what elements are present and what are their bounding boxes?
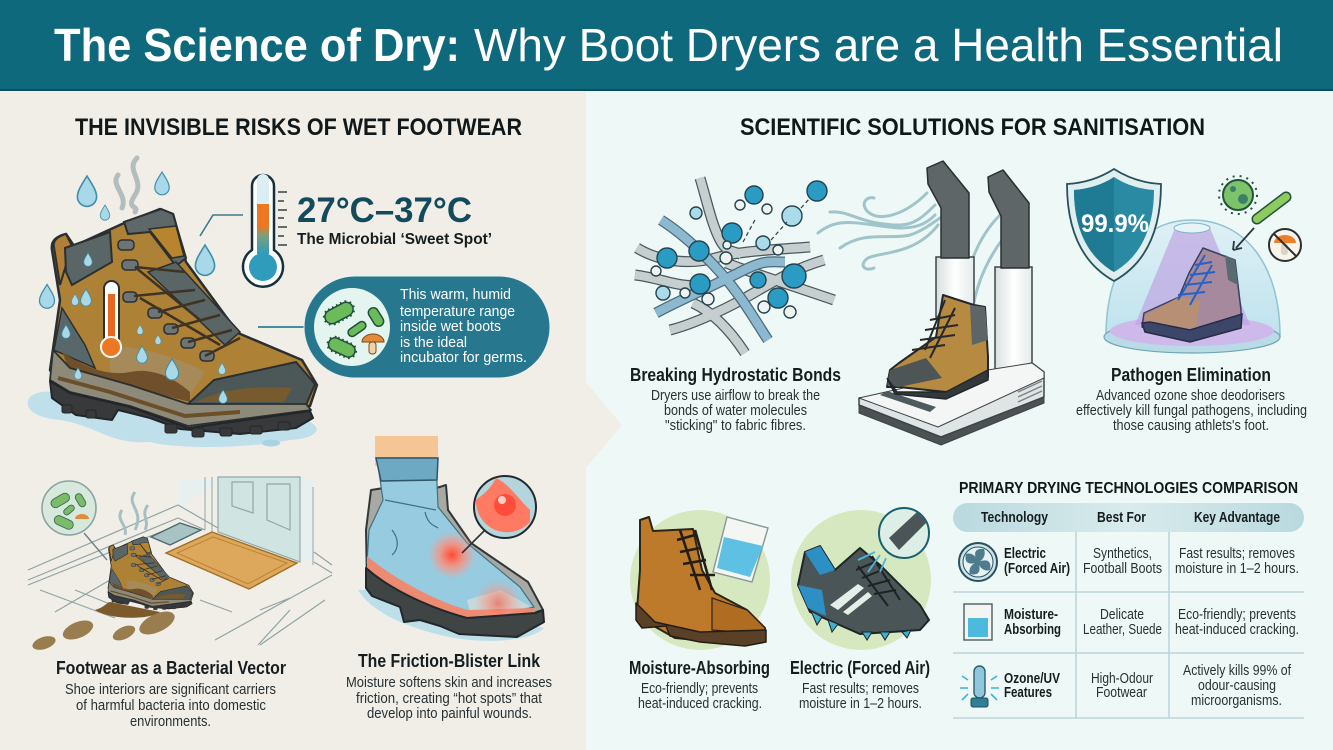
virus bbox=[1219, 176, 1257, 214]
icon: sachet bbox=[964, 604, 992, 640]
text: friction blister: Moisture softens skin and increases bbox=[346, 675, 552, 691]
text: moisture absorbing: heat-induced cracking. bbox=[638, 696, 762, 712]
shield: 99.9% bbox=[1081, 210, 1149, 238]
heading: moisture absorbing: Moisture-Absorbing bbox=[629, 658, 770, 678]
illustration: wet hiking boot bbox=[28, 158, 317, 447]
illustration: ozone dome with boot bbox=[1067, 169, 1301, 353]
sole bbox=[366, 568, 544, 637]
text: bacterial vector: of harmful bacteria into domestic bbox=[76, 698, 266, 714]
text: friction blister: develop into painful wounds. bbox=[367, 706, 532, 722]
red inner strip bbox=[367, 556, 536, 618]
base plate bbox=[1104, 321, 1280, 353]
callout: warm humid range: inside wet boots bbox=[400, 319, 501, 335]
text: pathogen elimination bbox=[1076, 388, 1307, 434]
sweet spot label: The Microbial ‘Sweet Spot’ bbox=[297, 231, 492, 248]
left tube bbox=[936, 257, 974, 317]
text: friction blister bbox=[346, 675, 552, 722]
row: ozone uv: High-Odour bbox=[1091, 671, 1153, 687]
airflow lines bbox=[818, 193, 1015, 315]
leg bbox=[375, 436, 438, 466]
steam bbox=[120, 492, 148, 535]
bacterium bbox=[1257, 197, 1286, 219]
row: ozone uv: Actively kills 99% of bbox=[1183, 663, 1292, 679]
heading: bacterial vector: Footwear as a Bacterial Vector bbox=[56, 658, 286, 678]
row: moisture absorbing: Leather, Suede bbox=[1083, 622, 1162, 638]
text: bacterial vector bbox=[65, 682, 276, 730]
panel: scientific solutions heading: SCIENTIFIC SOLUTIONS FOR SANITISATION bbox=[740, 114, 1205, 141]
text: hydrostatic bonds: Dryers use airflow to break the bbox=[651, 388, 820, 404]
text: moisture absorbing bbox=[638, 681, 762, 712]
row: ozone uv: Footwear bbox=[1096, 685, 1147, 701]
illustration: fabric fibres and water molecules bbox=[635, 178, 834, 353]
row: moisture absorbing: heat-induced cracking. bbox=[1175, 622, 1299, 638]
dome bbox=[1106, 220, 1280, 336]
row: moisture absorbing bbox=[964, 604, 1299, 640]
heading: electric forced air: Electric (Forced Air) bbox=[790, 658, 930, 678]
footprints bbox=[31, 607, 178, 652]
heading: pathogen elimination: Pathogen Elimination bbox=[1111, 365, 1271, 385]
water drops bbox=[40, 172, 227, 403]
puddle bbox=[28, 392, 317, 447]
row: electric: Football Boots bbox=[1083, 561, 1162, 577]
steam bbox=[116, 158, 138, 212]
panel: invisible risks heading: THE INVISIBLE RISKS OF WET FOOTWEAR bbox=[75, 114, 522, 141]
callout: warm humid range bbox=[304, 276, 550, 378]
sachet bbox=[713, 517, 768, 582]
text: electric forced air bbox=[799, 681, 922, 712]
outer boot shell bbox=[366, 485, 543, 614]
illustration: friction blister boot bbox=[358, 436, 544, 641]
text: pathogen elimination: Advanced ozone shoe deodorisers bbox=[1096, 388, 1285, 404]
callout: warm humid range: incubator for germs. bbox=[400, 350, 527, 366]
row: ozone uv: odour-causing bbox=[1198, 678, 1276, 694]
callout: warm humid range: is the ideal bbox=[400, 335, 467, 351]
sock cuff bbox=[376, 458, 438, 481]
icon: germs bbox=[314, 288, 390, 366]
icon: fan bbox=[959, 543, 997, 581]
hot spots bbox=[428, 531, 476, 579]
background: right panel bbox=[586, 91, 1333, 750]
doormat bbox=[166, 532, 297, 589]
table header: Key Advantage bbox=[1194, 510, 1280, 526]
nozzle bbox=[879, 508, 929, 558]
magnified blister bbox=[462, 530, 485, 553]
skirting and floor lines bbox=[28, 505, 332, 645]
row: electric bbox=[959, 543, 1299, 581]
temperature range: 27°C–37°C bbox=[297, 191, 472, 230]
text: electric forced air: Fast results; removes bbox=[802, 681, 919, 697]
title banner: The Science of Dry: bbox=[54, 19, 460, 71]
row: moisture absorbing: Eco-friendly; prevents bbox=[1178, 607, 1296, 623]
text: pathogen elimination: those causing athlets's foot. bbox=[1113, 418, 1269, 434]
illustration: leather boot with sachet bbox=[630, 510, 770, 650]
connector to callout bbox=[258, 326, 304, 328]
text: hydrostatic bonds: "sticking" to fabric fibres. bbox=[665, 418, 806, 434]
control panel bbox=[880, 391, 936, 412]
table header: Best For bbox=[1097, 510, 1146, 526]
small boot bbox=[108, 537, 193, 610]
comparison table heading: PRIMARY DRYING TECHNOLOGIES COMPARISON bbox=[959, 480, 1298, 497]
connector to thermometer bbox=[200, 215, 243, 236]
UV beam bbox=[1135, 228, 1250, 325]
vent bbox=[151, 523, 201, 545]
boot on dryer bbox=[887, 295, 988, 392]
row: ozone uv: Ozone/UV bbox=[1004, 671, 1060, 687]
heading: hydrostatic bonds: Breaking Hydrostatic Bonds bbox=[630, 365, 841, 385]
title banner: Why Boot Dryers are a Health Essential bbox=[474, 19, 1283, 71]
text: friction blister: friction, creating “hot spots” that bbox=[356, 691, 542, 707]
row: moisture absorbing: Delicate bbox=[1100, 607, 1144, 623]
title banner bbox=[0, 0, 1333, 91]
mud bbox=[95, 602, 160, 618]
text: electric forced air: moisture in 1–2 hours. bbox=[799, 696, 922, 712]
illustration: doorway with contaminated boot bbox=[28, 477, 332, 652]
right tube bbox=[995, 267, 1032, 379]
table header: Technology bbox=[981, 510, 1048, 526]
row: moisture absorbing: Moisture- bbox=[1004, 607, 1058, 623]
text: hydrostatic bonds bbox=[651, 388, 820, 434]
row: electric: Synthetics, bbox=[1093, 546, 1152, 562]
row: electric: moisture in 1–2 hours. bbox=[1175, 561, 1299, 577]
boot bbox=[1142, 248, 1241, 338]
text: bacterial vector: Shoe interiors are significant carriers bbox=[65, 682, 276, 698]
callout: warm humid range: This warm, humid bbox=[400, 287, 511, 303]
boot thermometer bbox=[101, 281, 121, 357]
wall and door bbox=[178, 477, 314, 562]
callout: warm humid range: temperature range bbox=[400, 304, 515, 320]
arrow divider between panels bbox=[584, 380, 622, 470]
row: ozone uv: Features bbox=[1004, 685, 1052, 701]
row: moisture absorbing: Absorbing bbox=[1004, 622, 1061, 638]
heading: friction blister: The Friction-Blister Link bbox=[358, 651, 541, 671]
row: electric: Fast results; removes bbox=[1179, 546, 1295, 562]
no fungi bbox=[1269, 229, 1301, 261]
illustration: boot dryer bbox=[859, 161, 1044, 445]
text: moisture absorbing: Eco-friendly; prevents bbox=[641, 681, 758, 697]
table header bbox=[953, 503, 1304, 532]
row: electric: Electric bbox=[1004, 546, 1046, 562]
germ callout bbox=[84, 533, 107, 560]
row: ozone uv: microorganisms. bbox=[1191, 693, 1282, 709]
background: left panel bbox=[0, 91, 586, 750]
text: bacterial vector: environments. bbox=[130, 714, 211, 730]
base bbox=[859, 375, 1044, 445]
row: ozone uv bbox=[960, 663, 1292, 709]
icon: UV lamp bbox=[960, 666, 999, 707]
illustration: football boot with nozzle bbox=[791, 508, 931, 650]
puddle bbox=[358, 590, 544, 641]
comparison table bbox=[953, 503, 1304, 718]
icon: thermometer bbox=[243, 174, 287, 287]
arrow bbox=[1233, 228, 1254, 250]
text: hydrostatic bonds: bonds of water molecules bbox=[664, 403, 807, 419]
sock and foot bbox=[367, 458, 534, 613]
shield bbox=[1067, 169, 1161, 281]
row: electric: (Forced Air) bbox=[1004, 561, 1070, 577]
